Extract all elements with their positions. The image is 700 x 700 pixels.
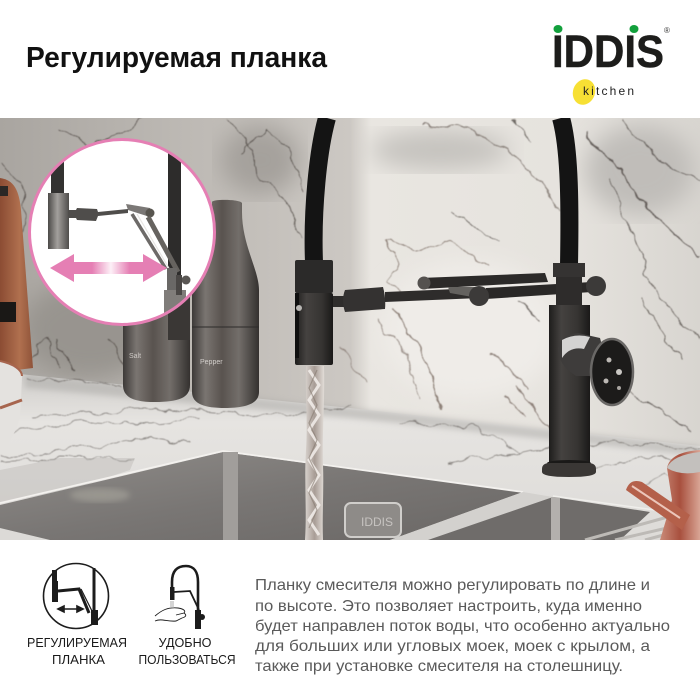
marble countertop [0, 372, 700, 540]
icon: easy to use [155, 566, 205, 629]
left steel sink [0, 451, 553, 540]
copper canister [0, 178, 33, 372]
right steel sink [428, 496, 682, 540]
description text: также при установке смесителя на столешницу. [255, 658, 623, 675]
logo: IDDIS kitchen: ® [664, 26, 670, 35]
description text: для больших или угловых моек, моек с крылом, а [255, 638, 650, 655]
sink drain label: IDDIS [361, 515, 393, 529]
faucet spray head [295, 260, 333, 365]
faucet body [542, 263, 601, 477]
icon label: adjustable bar, second line: ПЛАНКА [52, 652, 105, 667]
copper pan [626, 450, 700, 540]
inset circle: adjustable bar detail [30, 140, 214, 340]
logo: IDDIS kitchen [552, 25, 670, 108]
icon: adjustable bar [44, 564, 108, 628]
description text: будет направлен поток воды, что особенно актуально [255, 618, 670, 635]
logo: IDDIS kitchen: IDDIS [552, 26, 664, 77]
inset: bar linkage [68, 204, 190, 314]
marble wall [0, 118, 700, 448]
inset: hoses and head [48, 154, 181, 275]
icon label: adjustable bar: РЕГУЛИРУЕМАЯ [27, 635, 127, 650]
icon label: easy: УДОБНО [158, 635, 212, 650]
pepper grinder bottle: Pepper [200, 359, 223, 366]
pink double arrow [50, 254, 167, 282]
salt grinder bottle [123, 297, 190, 402]
description text: Планку смесителя можно регулировать по длине и [255, 577, 650, 594]
description text: по высоте. Это позволяет настроить, куда именно [255, 598, 642, 615]
water stream [305, 366, 324, 540]
pepper grinder bottle [192, 200, 259, 408]
description text [255, 577, 670, 675]
title: Регулируемая планка [26, 42, 328, 74]
white bowls [0, 360, 23, 434]
faucet hose [314, 118, 569, 265]
logo: IDDIS kitchen: kitchen [583, 84, 634, 98]
icon label: to use: ПОЛЬЗОВАТЬСЯ [138, 652, 236, 667]
faucet handle wheel [591, 339, 633, 405]
sink drain label [345, 503, 401, 537]
photo: kitchen faucet scene [0, 118, 700, 540]
adjustable bar [333, 273, 606, 312]
salt grinder bottle: Salt [129, 353, 141, 360]
